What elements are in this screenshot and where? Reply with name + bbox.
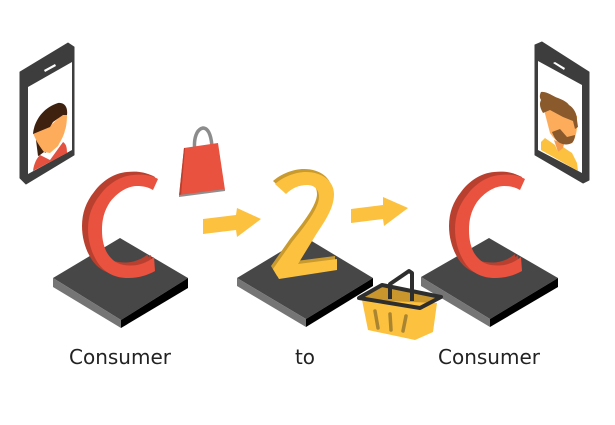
- letter C: left: [82, 172, 158, 278]
- woman portrait: [33, 103, 67, 171]
- phone: right with man: [535, 42, 589, 183]
- label: to: to: [295, 345, 315, 369]
- platform: middle: [237, 237, 373, 327]
- arrow: first: [203, 208, 261, 237]
- icon: shopping basket: [359, 271, 441, 340]
- label: Consumer right: Consumer: [438, 345, 541, 369]
- arrow: second: [351, 197, 408, 226]
- platform: right: [421, 238, 558, 327]
- numeral 2: [271, 169, 337, 279]
- man portrait: [540, 92, 578, 171]
- label: Consumer left: Consumer: [69, 345, 172, 369]
- letter C: right: [449, 172, 525, 278]
- platform: left: [53, 238, 188, 328]
- icon: shopping bag: [179, 128, 225, 197]
- phone: left with woman: [20, 43, 74, 184]
